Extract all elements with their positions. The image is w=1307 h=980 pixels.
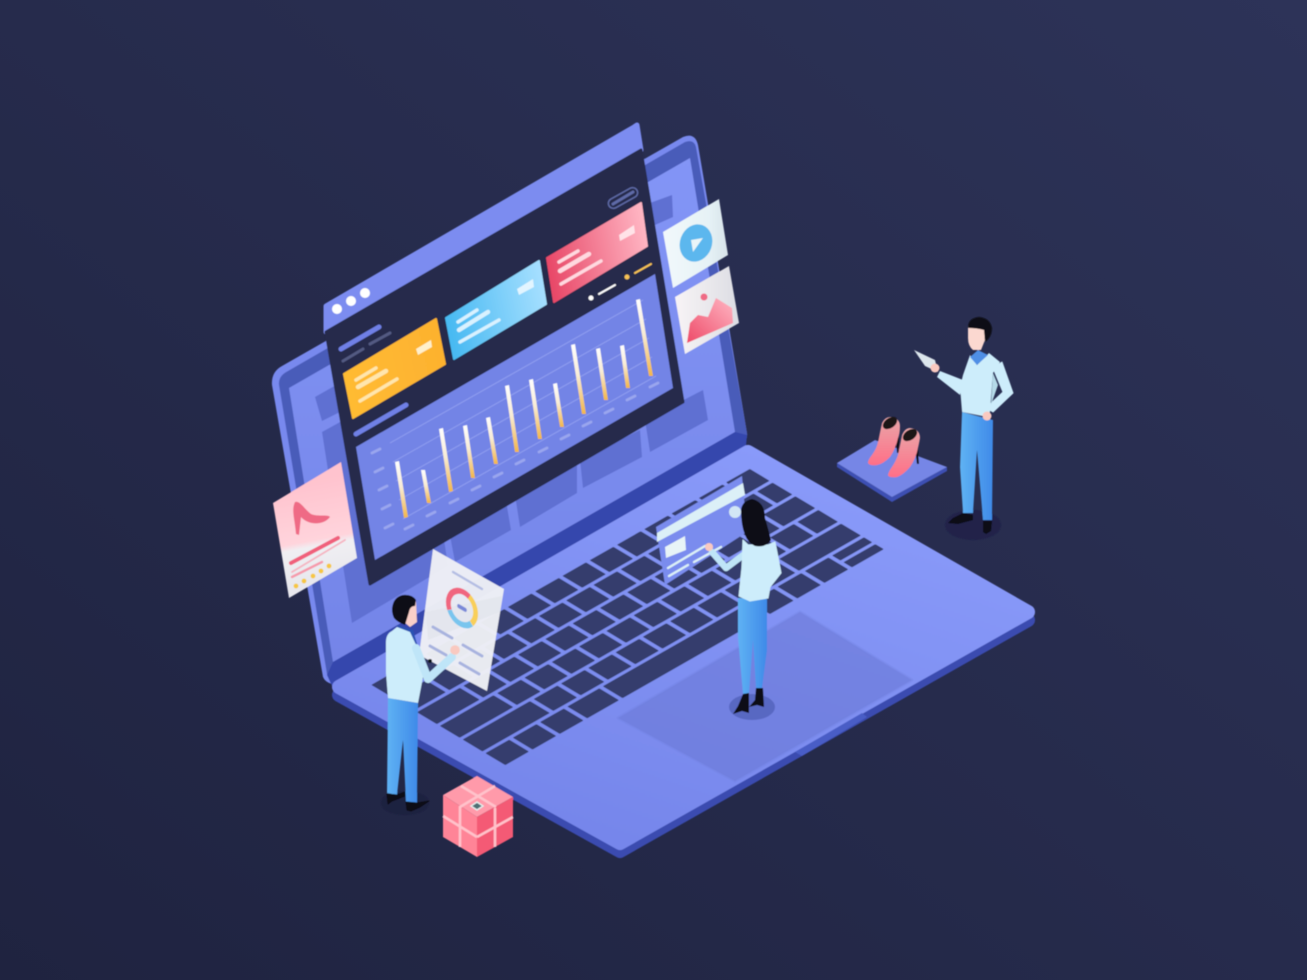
card chip (665, 536, 686, 558)
report hand holder (428, 659, 432, 663)
icon: mountain (687, 298, 733, 343)
icon: high heel (293, 502, 330, 535)
shoes (387, 792, 405, 804)
pants (387, 698, 418, 803)
window body (326, 150, 683, 584)
pants (960, 412, 993, 520)
donut chart (440, 575, 484, 641)
hip hand (982, 412, 992, 420)
floating card: shoe product (273, 462, 357, 598)
lid bezel (279, 141, 747, 680)
sheet sheen (426, 596, 502, 640)
shoe left (868, 414, 900, 465)
axis ticks (372, 383, 658, 529)
screen window tiles (315, 195, 708, 623)
card text lines (668, 546, 721, 576)
base top surface (339, 452, 1028, 843)
box left face (443, 795, 477, 857)
base side (339, 460, 1028, 851)
card stripe (657, 483, 745, 542)
person: man with tablet (914, 317, 1013, 540)
face (968, 326, 985, 350)
box right face (477, 797, 513, 857)
grid (390, 300, 656, 519)
shirt (739, 540, 781, 601)
floating credit card (656, 476, 747, 585)
hair (392, 595, 416, 625)
illustration (272, 125, 1028, 857)
icon: sun (700, 294, 708, 300)
heels (733, 693, 749, 714)
top-right pill button (607, 186, 639, 210)
ribbons (443, 786, 513, 847)
icon: play circle (674, 220, 718, 266)
product text lines (291, 538, 345, 577)
floating card: image (675, 266, 739, 354)
collar (970, 350, 988, 365)
shoes (948, 513, 973, 524)
shadow (381, 791, 429, 815)
floating report sheet (419, 549, 504, 691)
rating stars (294, 564, 331, 588)
gift box (443, 776, 513, 857)
hand (450, 645, 460, 655)
lid rim (272, 136, 747, 684)
arm (712, 552, 746, 568)
red stat card (547, 203, 647, 302)
sleeve (937, 371, 963, 395)
hinge band (327, 432, 747, 686)
stand side (837, 463, 947, 502)
person: woman at credit card (705, 499, 781, 720)
header lines (341, 327, 406, 434)
laptop base (339, 452, 1028, 851)
floating card: video play (663, 199, 728, 288)
shoe right (888, 426, 920, 477)
shirt shade (991, 373, 998, 405)
window controls (332, 288, 370, 314)
person: man holding report (381, 595, 460, 815)
pants (738, 598, 767, 694)
box top (443, 776, 513, 817)
yellow stat card (344, 319, 445, 418)
shadow (945, 510, 1001, 540)
collar (397, 625, 418, 647)
bars (395, 299, 653, 518)
hair (968, 317, 992, 342)
chart panel (356, 274, 673, 560)
bar chart (356, 274, 673, 560)
front notch (795, 713, 867, 756)
torso (960, 353, 1000, 417)
sheet heading line (453, 572, 482, 589)
keyboard (373, 470, 882, 764)
hand (930, 364, 940, 372)
card logo (729, 506, 741, 518)
hair (741, 499, 771, 546)
box label (471, 802, 483, 810)
trackpad (618, 612, 912, 781)
laptop lid (272, 136, 747, 686)
hand (705, 543, 713, 551)
tablet (914, 350, 938, 372)
dashboard window (326, 125, 683, 584)
shirt (386, 627, 425, 703)
face (404, 601, 417, 627)
chart legend (588, 264, 651, 300)
sheet text lines (430, 627, 482, 674)
blue stat card (446, 261, 546, 359)
lid screen (289, 158, 735, 662)
window title bar (326, 125, 641, 332)
icon: play triangle (691, 238, 703, 252)
shadow (729, 694, 775, 720)
stand top (837, 440, 947, 497)
arm (986, 362, 1013, 412)
arm (416, 648, 452, 679)
shoes display stand (837, 414, 947, 502)
